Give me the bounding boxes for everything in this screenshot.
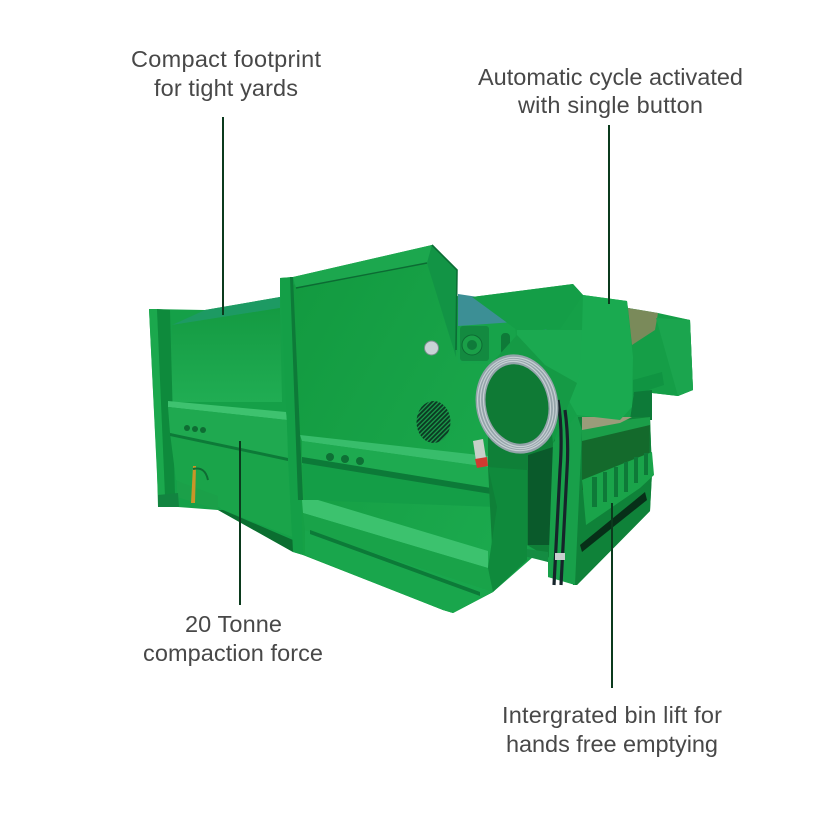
callout: bin lift: Intergrated bin lift for: [502, 702, 722, 728]
rear body section: [149, 297, 293, 552]
callout: bin lift: hands free emptying: [506, 731, 718, 757]
coiled cable and plug: [469, 350, 565, 468]
hopper lid: [472, 284, 633, 443]
base silhouette: [149, 245, 693, 613]
callout: automatic cycle: with single button: [517, 92, 703, 118]
vertical pillar: [280, 277, 303, 555]
front side body: [293, 245, 497, 613]
vent grille: [416, 401, 450, 443]
blue opening: [458, 294, 547, 340]
callout: bin lift: [502, 503, 722, 757]
side frame recess: [488, 365, 555, 565]
hoses: [554, 400, 568, 585]
callout: compact footprint: Compact footprint: [131, 46, 321, 72]
chute on right: [628, 308, 693, 420]
callout: automatic cycle: [478, 64, 743, 304]
callout: compact footprint: for tight yards: [154, 75, 298, 101]
bearing block: [458, 322, 517, 365]
compactor machine photo: [149, 245, 693, 613]
callout: compaction force: 20 Tonne: [185, 611, 282, 637]
callout: compact footprint: [131, 46, 321, 315]
callout: compaction force: compaction force: [143, 640, 323, 666]
bin lift: [573, 417, 654, 585]
pressure gauge: [424, 341, 438, 355]
front frame pillar: [548, 415, 582, 585]
callout: compaction force: [143, 441, 323, 666]
callout: automatic cycle: Automatic cycle activated: [478, 64, 743, 90]
